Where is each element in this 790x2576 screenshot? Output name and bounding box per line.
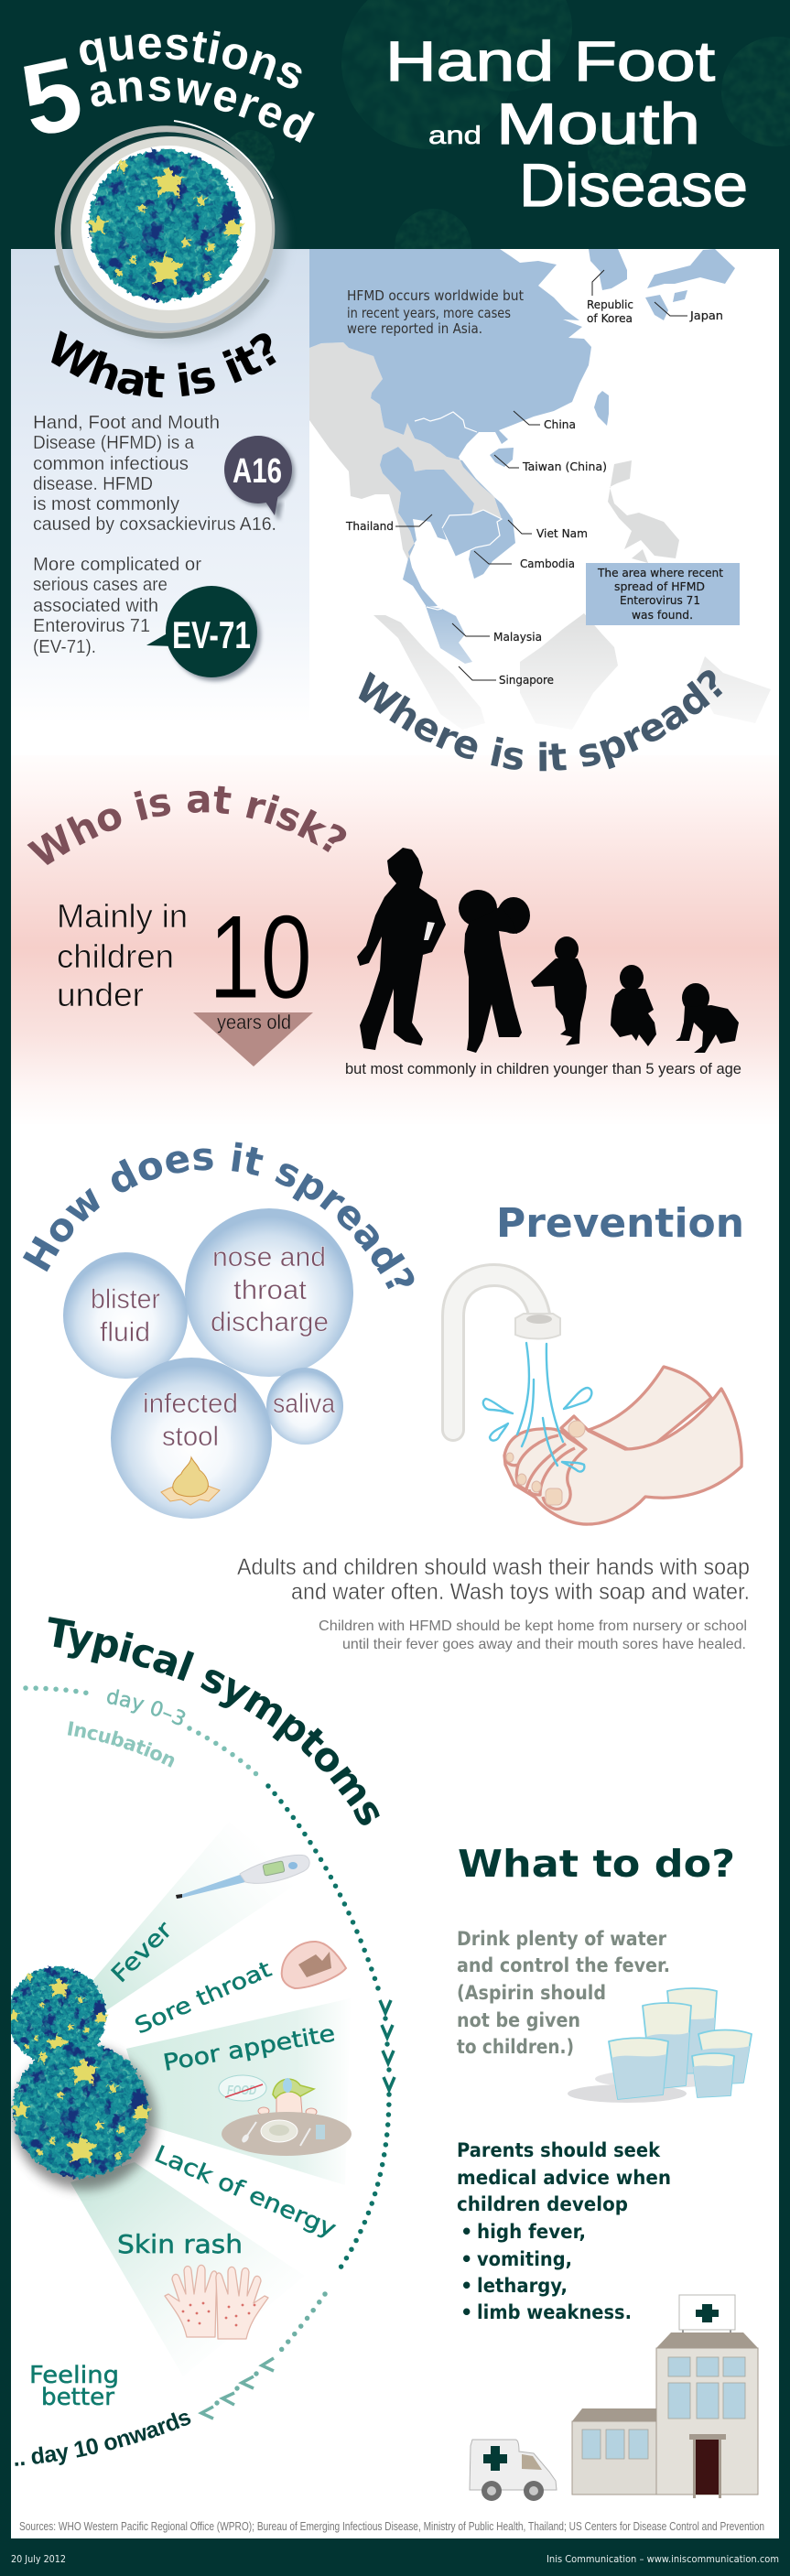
advice: seek medical help: limb weakness. [477, 2301, 632, 2323]
what is it text: More complicated or [33, 555, 201, 575]
child 4 [611, 965, 656, 1046]
advice: drink water: to children.) [457, 2036, 574, 2058]
map of Asia [309, 249, 778, 746]
country labels: Japan [689, 308, 723, 322]
child [258, 2078, 317, 2116]
legend box [586, 563, 740, 625]
table [222, 2112, 352, 2156]
legend box: Enterovirus 71 [620, 593, 700, 607]
advice: seek medical help: • [460, 2248, 472, 2270]
chevrons: fading out [201, 2358, 274, 2419]
map intro text: HFMD occurs worldwide but [347, 287, 524, 304]
icon: ambulance [470, 2440, 557, 2501]
child 2 [459, 890, 530, 1053]
legend box: was found. [632, 608, 693, 622]
child 3 [531, 936, 587, 1045]
symptom labels [29, 1916, 341, 2411]
big number 10: 10 [209, 890, 312, 1023]
symptom labels: Fever [106, 1916, 178, 1987]
heading: 5 questions answered: questions [80, 31, 302, 137]
country labels: China [544, 417, 576, 431]
timeline arc [26, 1688, 395, 2419]
advice: drink water: Drink plenty of water [457, 1928, 667, 1950]
advice: seek medical help: • [460, 2275, 472, 2297]
what is it text: caused by coxsackievirus A16. [33, 514, 276, 535]
callout: A16: A16 [233, 452, 282, 491]
header background viruses [225, 0, 790, 249]
what is it text: is most commonly [33, 494, 179, 514]
advice: seek medical help: • [460, 2301, 472, 2323]
years old triangle [193, 1011, 313, 1066]
heading: who is at risk: Who is at risk? [27, 785, 346, 865]
map intro text [347, 287, 524, 337]
map intro text: were reported in Asia. [347, 320, 482, 337]
callout: EV-71 [146, 586, 261, 681]
what is it text: associated with [33, 596, 158, 616]
icon: thermometer [176, 1855, 309, 1899]
prevention text: Adults and children should wash their hands with soap [237, 1554, 750, 1580]
icon: glasses of water [568, 1988, 752, 2103]
bubbles: how does it spread: fluid [100, 1317, 150, 1348]
icon: child at table [219, 2075, 352, 2156]
legend box: spread of HFMD [614, 579, 705, 593]
symptom labels: Poor appetite [161, 2019, 337, 2076]
hospital sign [679, 2295, 735, 2333]
risk text: children [57, 937, 174, 975]
label: incubation: Incubation [68, 1721, 174, 1768]
chevrons: going down [380, 2000, 395, 2090]
blue countries [309, 249, 735, 664]
what is it text: (EV-71). [33, 637, 96, 657]
callout: EV-71: EV-71 [172, 613, 251, 656]
child 1 [357, 848, 446, 1050]
heading: 5 questions answered: answered [90, 77, 315, 143]
advice: drink water: (Aspirin should [457, 1982, 606, 2004]
advice: seek medical help: vomiting, [477, 2248, 572, 2270]
title: Hand Foot [385, 30, 715, 92]
what is it text: disease. HFMD [33, 474, 153, 494]
what is it text [33, 413, 276, 657]
speech bubble: FOOD [227, 2083, 256, 2098]
label: day 0-3: day 0–3 [107, 1689, 185, 1725]
bubbles: how does it spread: infected [143, 1389, 238, 1419]
advice: seek medical help: medical advice when [457, 2167, 671, 2189]
bubbles: how does it spread: throat [233, 1275, 308, 1305]
years old triangle: years old [217, 1011, 291, 1034]
country labels: Malaysia [493, 630, 542, 644]
what is it text: Hand, Foot and Mouth [33, 413, 220, 433]
speech bubble [219, 2075, 266, 2101]
panel: who is at risk background [11, 755, 779, 1126]
bubbles: how does it spread: blister [91, 1284, 160, 1315]
legend box: The area where recent [597, 566, 723, 579]
advice: seek medical help: high fever, [477, 2221, 586, 2243]
title [385, 30, 748, 219]
advice: seek medical help: children develop [457, 2193, 628, 2215]
day 10 onwards: .. day 10 onwards [15, 2412, 190, 2466]
title: Disease [519, 151, 748, 219]
advice: drink water: not be given [457, 2009, 580, 2031]
icon: hospital [572, 2295, 758, 2498]
white borders [415, 412, 502, 610]
risk text [57, 897, 188, 1013]
what is it text: common infectious [33, 454, 189, 474]
country labels: Taiwan (China) [522, 460, 607, 473]
callout: A16 [224, 436, 295, 521]
country labels: Cambodia [520, 557, 575, 570]
advice: seek medical help: Parents should seek [457, 2139, 661, 2161]
hands [504, 1367, 741, 1524]
symptom labels: Feeling [29, 2362, 119, 2389]
advice: drink water: and control the fever. [457, 1954, 670, 1976]
symptom beams [70, 1822, 351, 2376]
advice: seek medical help: lethargy, [477, 2275, 568, 2297]
heading: 5 questions answered [12, 31, 315, 158]
illustration: washing hands [453, 1275, 741, 1524]
country labels: of Korea [587, 311, 633, 325]
advice: seek medical help: • [460, 2221, 472, 2243]
prevention text: Children with HFMD should be kept home from nursery or school [319, 1618, 747, 1634]
grey neighbouring land [309, 342, 771, 730]
icon: hands with rash [165, 2265, 268, 2339]
virus illustration [88, 149, 244, 301]
plate with virus [38, 109, 291, 354]
tap [453, 1275, 560, 1430]
symptom labels: better [41, 2384, 114, 2411]
country labels: Viet Nam [536, 526, 588, 540]
icon: sore throat [282, 1942, 346, 1988]
symptom labels: Sore throat [131, 1956, 276, 2039]
what is it text: serious cases are [33, 575, 168, 595]
bubbles: how does it spread: discharge [211, 1307, 329, 1337]
what is it text: Disease (HFMD) is a [33, 433, 195, 453]
risk text: under [57, 976, 144, 1013]
heading: where is it spread: Where is it spread? [359, 670, 723, 771]
child 5 [676, 983, 739, 1053]
what is it text: Enterovirus 71 [33, 616, 150, 636]
country labels: Singapore [499, 673, 554, 687]
prevention text: and water often. Wash toys with soap and water. [291, 1579, 750, 1605]
heading: how does it spread: How does it spread? [22, 1142, 414, 1289]
country labels: Republic [587, 298, 633, 311]
prevention text [237, 1554, 750, 1652]
map intro text: in recent years, more cases [347, 305, 511, 321]
water [483, 1343, 591, 1472]
map fade [309, 604, 778, 746]
advice: drink water [457, 1928, 670, 2058]
panel: what is it background [11, 249, 309, 723]
heading: 5 questions answered: 5 [12, 35, 92, 158]
title: Mouth [496, 92, 700, 157]
children silhouettes [357, 848, 739, 1053]
title: and [428, 121, 482, 149]
risk text: Mainly in [57, 897, 188, 935]
country labels [345, 298, 723, 687]
caption under silhouettes: but most commonly in children younger than 5 years of age [345, 1060, 741, 1077]
leader lines [395, 270, 687, 680]
bubbles: how does it spread: saliva [273, 1389, 335, 1419]
virus pair [6, 1966, 156, 2190]
heading: what is it: What is it? [51, 330, 276, 397]
bubbles: how does it spread: stool [162, 1422, 219, 1452]
country labels: Thailand [345, 519, 394, 533]
prevention text: until their fever goes away and their mouth sores have healed. [342, 1637, 746, 1652]
bubbles: how does it spread: nose and [212, 1242, 326, 1272]
symptom labels: Skin rash [117, 2229, 243, 2259]
symptom labels: Lack of energy [151, 2140, 341, 2243]
bubbles: how does it spread [63, 1208, 353, 1519]
footer date: 20 July 2012 [11, 2553, 66, 2565]
heading: typical symptoms: Typical symptoms [48, 1617, 380, 1825]
heading: prevention: Prevention [496, 1200, 744, 1247]
heading: what to do: What to do? [458, 1842, 735, 1886]
icon: stool [161, 1457, 220, 1505]
advice: seek medical help [457, 2139, 671, 2323]
